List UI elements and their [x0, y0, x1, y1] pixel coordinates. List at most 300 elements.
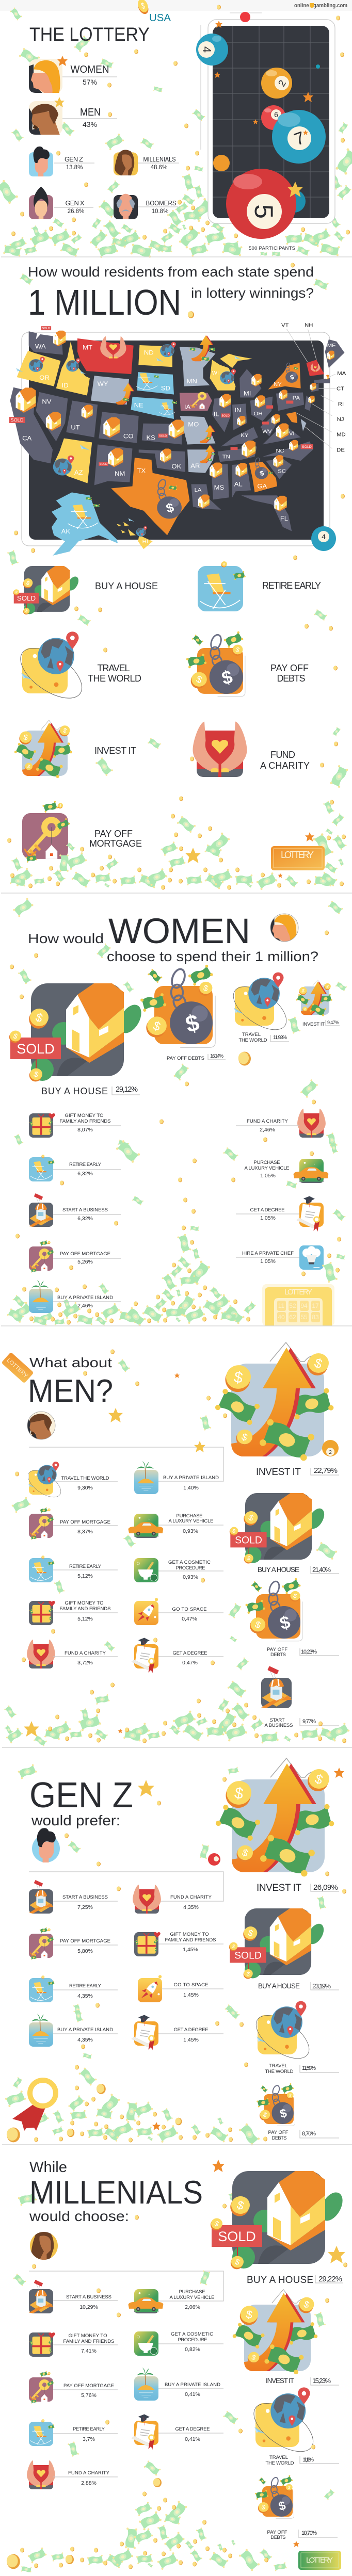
- list item: private island: 1,40%: [183, 1485, 199, 1491]
- state labels: KS: [146, 434, 155, 441]
- top choice: travel: TRAVEL: [242, 1032, 261, 1038]
- top choice: start a business: [261, 1666, 339, 1728]
- list item: luxury vehicle: A LUXURY VEHICLE: [245, 1165, 289, 1171]
- stat: women: WOMEN: [70, 64, 109, 75]
- stat: men: MEN: [80, 107, 101, 118]
- legend: pay off mortgage: MORTGAGE: [89, 838, 142, 849]
- list item: fund a charity: 2,88%: [81, 2480, 97, 2486]
- legend: pay off mortgage: [22, 801, 142, 863]
- list item: go to space: GO TO SPACE: [172, 1607, 206, 1612]
- list item: get a degree: GET A DEGREE: [173, 2027, 209, 2033]
- section: the lottery overview: [0, 0, 352, 258]
- list item: retire early: 6,32%: [77, 1171, 93, 1177]
- list item: get a degree: 0,47%: [182, 1660, 198, 1666]
- list item: start a business: 7,25%: [77, 1904, 93, 1910]
- state labels: CA: [22, 435, 32, 442]
- state labels: NE: [134, 402, 143, 409]
- ball 5 small: [208, 1853, 220, 1866]
- state labels: SD: [161, 385, 170, 392]
- top choice: travel the world: THE WORLD: [265, 2069, 294, 2075]
- top choice: invest it: INVEST IT: [256, 1467, 301, 1478]
- top choice: pay off debts: [255, 2475, 338, 2540]
- list item: go to space: 0,47%: [182, 1616, 197, 1622]
- list item: gift money: GIFT MONEY TO: [170, 1932, 209, 1937]
- list item: private island: BUY A PRIVATE ISLAND: [163, 1475, 219, 1481]
- top choice: start a business: A BUSINESS: [264, 1723, 293, 1728]
- list item: retire early: 5,12%: [77, 1573, 93, 1579]
- list item: retire early: RETIRE EARLY: [69, 1564, 102, 1569]
- falling money: men: [4, 1350, 350, 1746]
- list item: cosmetic procedure: 0,93%: [183, 1574, 198, 1580]
- top choice: buy a house: SOLD: [218, 2229, 256, 2244]
- legend: travel the world: TRAVEL: [97, 663, 130, 673]
- state labels: OR: [39, 375, 50, 381]
- top choice: invest it: [214, 1342, 339, 1478]
- lottery ticket orange: LOTTERY: [281, 850, 314, 860]
- external state labels: RI: [338, 401, 344, 407]
- top choice: pay off debts: PAY OFF: [268, 2130, 289, 2135]
- list item: gift money: GIFT MONEY TO: [65, 1113, 103, 1119]
- list item: private island: [134, 1461, 219, 1494]
- list item: start a business: [29, 2280, 118, 2313]
- state labels: FL: [280, 515, 288, 522]
- falling money: overview: [0, 0, 352, 258]
- list item: travel the world: TRAVEL THE WORLD: [61, 1476, 109, 1481]
- list item: start a business: START A BUSINESS: [62, 1894, 108, 1900]
- list item: retire early: [29, 1975, 118, 2002]
- top choice: invest: [296, 980, 340, 1027]
- legend: travel the world: [12, 631, 141, 708]
- map background: [29, 341, 324, 540]
- top choice: invest it: INVEST IT: [257, 1883, 301, 1893]
- stat: boomers: BOOMERS: [146, 199, 177, 207]
- stat: gen x: GEN X: [65, 199, 85, 207]
- lottery ticket green: LOTTERY: [306, 2556, 333, 2565]
- list item: get a degree: [132, 1638, 223, 1673]
- state labels: LA: [195, 488, 202, 493]
- state labels: OK: [171, 463, 182, 470]
- list item: retire early: 3,7%: [83, 2436, 95, 2442]
- list item: private island: 2,46%: [77, 1303, 93, 1309]
- list item: pay off mortgage: PAY OFF MORTGAGE: [60, 1938, 110, 1944]
- stars: [214, 21, 313, 197]
- list item: pay off mortgage: 5,76%: [81, 2392, 97, 2399]
- list item: retire early: RETIRE EARLY: [69, 1162, 102, 1168]
- map icon: mortgage key: [190, 393, 205, 409]
- top choice: buy a house: 29,12%: [116, 1086, 138, 1094]
- list item: cosmetic procedure: GET A COSMETIC: [168, 1560, 211, 1565]
- list item: start a business: 10,29%: [79, 2304, 98, 2310]
- legend: buy a house: [13, 566, 158, 614]
- list item: private island: 0,41%: [185, 2391, 200, 2397]
- falling money: gen z: [5, 1764, 346, 2146]
- list item: luxury vehicle: PURCHASE: [254, 1160, 280, 1165]
- list item: fund a charity: [27, 1640, 118, 1668]
- state labels: IA: [184, 404, 191, 411]
- heading: the lottery: THE LOTTERY: [29, 24, 150, 45]
- lottery ticket orange: [271, 846, 325, 870]
- list item: private island: [29, 2014, 118, 2047]
- ball 4: 4: [200, 46, 213, 53]
- list item: gift money: [29, 1600, 118, 1625]
- list item: fund a charity: [133, 1885, 212, 1914]
- top choice: travel the world: [249, 2001, 339, 2075]
- legend: pay off mortgage: PAY OFF: [94, 829, 133, 839]
- map icons: charity: [100, 336, 320, 371]
- heading: gen z: GEN Z: [29, 1775, 133, 1815]
- top choice: travel the world: TRAVEL: [269, 2063, 287, 2069]
- stat: boomers: [114, 194, 178, 219]
- list item: gift money: [29, 2332, 118, 2357]
- ball 4: [196, 34, 228, 66]
- logo shield icon: [310, 3, 314, 8]
- state labels: VI: [289, 431, 295, 437]
- legend: pay off debts: PAY OFF: [270, 663, 309, 673]
- stars: [138, 1768, 344, 1796]
- big medal: [12, 2078, 58, 2131]
- top choice: travel the world: 11,11%: [302, 2457, 314, 2463]
- lottery card: 55: [300, 1314, 308, 1321]
- state labels: CO: [123, 433, 134, 440]
- lottery card: 83: [312, 1314, 319, 1321]
- state labels: PA: [293, 395, 300, 401]
- external state labels: [281, 322, 346, 453]
- top choice: buy a house: 21,40%: [312, 1566, 331, 1574]
- list item: gift money: FAMILY AND FRIENDS: [165, 1937, 216, 1943]
- list item: pay off mortgage: [29, 2371, 118, 2404]
- heading: men: MEN?: [28, 1373, 113, 1409]
- ticket: lottery tilted: [1, 1352, 34, 1383]
- top choice: invest: INVEST IT: [302, 1022, 325, 1027]
- list item: private chef: 1,05%: [260, 1258, 276, 1265]
- section: spending legend: [7, 561, 348, 890]
- section: women: [7, 898, 347, 1326]
- list item: get a degree: GET A DEGREE: [250, 1207, 285, 1213]
- list item: get a degree: [132, 2414, 223, 2450]
- list item: get a degree: [132, 2015, 223, 2050]
- millenial portrait: [30, 2230, 58, 2260]
- participants label: 500 PARTICIPANTS: [249, 246, 295, 251]
- state labels: HI: [142, 539, 148, 545]
- stat: gen z: 13.8%: [66, 165, 83, 171]
- state labels: ID: [62, 382, 69, 389]
- top choice: buy a house: SOLD: [17, 1041, 55, 1057]
- list item: luxury vehicle: [129, 2289, 215, 2313]
- top choice: buy a house: [211, 2171, 347, 2286]
- stars: [212, 2160, 345, 2547]
- ball 5: 5: [249, 204, 278, 219]
- legend: fund a charity: A CHARITY: [260, 760, 310, 771]
- map panel: [22, 332, 330, 546]
- list item: start a business: [29, 1193, 121, 1227]
- state labels: [22, 343, 336, 545]
- top choice: pay off debts: DEBTS: [270, 1652, 286, 1658]
- sold signs: SOLD: [159, 435, 167, 438]
- list item: start a business: 6,32%: [77, 1216, 93, 1222]
- list item: cosmetic procedure: PROCEDURE: [178, 2337, 207, 2343]
- list item: start a business: [29, 1880, 118, 1914]
- sold signs: SOLD: [100, 463, 107, 466]
- top choice: buy a house: 23,19%: [312, 1982, 331, 1990]
- top choice: buy a house: BUY A HOUSE: [247, 2275, 313, 2286]
- list item: private chef: [236, 1245, 324, 1270]
- woman portrait: [270, 914, 298, 942]
- list item: fund a charity: 3,72%: [77, 1660, 93, 1666]
- top choice: start a business: START: [269, 1718, 285, 1723]
- list item: luxury vehicle: PURCHASE: [177, 1513, 202, 1519]
- legend: pay off debts: [186, 631, 309, 696]
- state labels: IN: [234, 407, 241, 414]
- top choice: buy a house: SOLD: [234, 1950, 262, 1962]
- list item: private chef: HIRE A PRIVATE CHEF: [242, 1251, 294, 1256]
- state labels: MN: [187, 378, 197, 385]
- list item: get a degree: GET A DEGREE: [172, 1650, 207, 1656]
- list item: gift money: FAMILY AND FRIENDS: [60, 1119, 110, 1124]
- top choice: travel the world: THE WORLD: [265, 2460, 294, 2466]
- state labels: NC: [276, 448, 284, 454]
- list item: pay off mortgage: PAY OFF MORTGAGE: [60, 1251, 110, 1257]
- top choice: travel the world: TRAVEL: [269, 2455, 288, 2460]
- state labels: ME: [327, 343, 336, 349]
- list item: cosmetic procedure: [134, 2331, 223, 2356]
- top choice: travel: 11,93%: [273, 1035, 287, 1041]
- top choice: travel: [226, 973, 294, 1043]
- list item: fund a charity: FUND A CHARITY: [170, 1894, 212, 1900]
- top choice: invest it: 2: [329, 1450, 332, 1455]
- falling money: map: [7, 263, 345, 565]
- man portrait: [27, 1412, 55, 1439]
- list item: get a degree: 1,05%: [260, 1215, 276, 1221]
- state labels: WA: [35, 343, 46, 350]
- legend: fund a charity: [193, 721, 310, 777]
- state labels: OH: [254, 411, 262, 417]
- stat: gen x: [29, 187, 93, 219]
- list item: luxury vehicle: A LUXURY VEHICLE: [168, 1518, 214, 1524]
- list item: private island: [29, 1280, 121, 1313]
- list item: pay off mortgage: 8,37%: [77, 1529, 93, 1535]
- state labels: AZ: [74, 469, 83, 476]
- list item: pay off mortgage: [29, 1507, 118, 1540]
- ticket: lottery tilted: LOTTERY: [6, 1357, 29, 1380]
- lottery card: LOTTERY: [284, 1288, 312, 1297]
- state labels: KY: [241, 432, 248, 439]
- list item: private island: BUY A PRIVATE ISLAND: [165, 2382, 220, 2388]
- stat: boomers: 10.8%: [152, 208, 168, 215]
- falling money: heading: [18, 2192, 347, 2269]
- top choice: buy a house: BUY A HOUSE: [258, 1982, 300, 1990]
- top choice: buy a house: [230, 1493, 339, 1574]
- top choice: buy a house: SOLD: [235, 1534, 262, 1546]
- lottery card: 17: [312, 1302, 319, 1309]
- heading: would prefer: would prefer:: [31, 1812, 120, 1828]
- section: state map: [7, 263, 346, 565]
- list item: retire early: [29, 2419, 118, 2446]
- list item: retire early: 4,35%: [77, 1993, 93, 1999]
- top choice: invest it: [215, 1758, 339, 1893]
- list item: pay off mortgage: PAY OFF MORTGAGE: [63, 2383, 114, 2389]
- falling money: legend: [7, 607, 348, 890]
- list item: get a degree: 0,41%: [185, 2436, 200, 2442]
- top choice: pay off debts: PAY OFF: [267, 2530, 287, 2535]
- map icons: debts: [157, 363, 298, 519]
- sold signs: SOLD: [221, 415, 230, 417]
- state labels: UT: [71, 424, 80, 431]
- top choice: invest: 9,47%: [327, 1020, 339, 1025]
- state labels: MI: [244, 390, 251, 397]
- top choice: invest it: [232, 2290, 339, 2385]
- list item: retire early: [29, 1155, 121, 1181]
- external state labels: DE: [337, 447, 345, 453]
- ball 6: 6: [274, 110, 278, 119]
- list item: start a business: START A BUSINESS: [62, 1207, 108, 1213]
- top choice: start a business: 9,77%: [302, 1719, 316, 1725]
- lottery card: 40: [278, 1314, 285, 1321]
- lottery card: 62: [289, 1314, 296, 1321]
- top choice: buy a house: BUY A HOUSE: [41, 1086, 108, 1096]
- state labels: ND: [144, 349, 154, 356]
- list item: cosmetic procedure: GET A COSMETIC: [171, 2331, 213, 2337]
- sold signs: SOLD: [302, 445, 312, 449]
- list item: gift money: 7,41%: [81, 2348, 97, 2354]
- top choice: pay off debts: PAY OFF DEBTS: [167, 1056, 204, 1061]
- list item: gift money: [134, 1932, 223, 1956]
- falling money: women top: [10, 898, 347, 1148]
- list item: private island: [134, 2368, 223, 2401]
- bracket line: [29, 1447, 223, 1481]
- ball 7: [272, 110, 326, 164]
- list item: go to space: [138, 1975, 223, 2002]
- heading: women: WOMEN: [108, 911, 250, 951]
- heading: how would residents: How would residents from each state spend: [28, 264, 314, 280]
- list item: fund a charity: [236, 1109, 326, 1138]
- state labels: TN: [222, 454, 230, 460]
- state labels: NY: [274, 381, 282, 387]
- stat: women: 57%: [83, 78, 97, 86]
- legend: retire early: RETIRE EARLY: [262, 580, 321, 591]
- state labels: GA: [257, 483, 267, 490]
- heading: in lottery winnings: in lottery winnings?: [191, 285, 314, 301]
- state labels: SC: [278, 468, 286, 474]
- list item: gift money: FAMILY AND FRIENDS: [60, 1606, 110, 1612]
- ball 4 on map: 4: [322, 532, 326, 541]
- legend: invest it: INVEST IT: [94, 746, 136, 756]
- list item: fund a charity: 4,35%: [183, 1904, 199, 1910]
- list item: gift money: 8,07%: [77, 1127, 93, 1133]
- list item: pay off mortgage: 5,26%: [77, 1259, 93, 1265]
- top choice: invest it: 26,09%: [313, 1883, 338, 1892]
- heading: would choose: would choose:: [29, 2208, 129, 2224]
- top choice: buy a house: [9, 983, 146, 1096]
- map icons: houses: [16, 331, 334, 511]
- list item: go to space: [134, 1598, 223, 1625]
- list item: luxury vehicle: [245, 1159, 328, 1183]
- external state labels: NH: [305, 322, 313, 328]
- list item: gift money: [29, 1113, 121, 1138]
- gen z portrait: [32, 1828, 60, 1862]
- state labels: TX: [137, 467, 146, 474]
- external state labels: NJ: [337, 416, 344, 423]
- list item: pay off mortgage: 5,80%: [77, 1948, 93, 1954]
- list item: luxury vehicle: 1,05%: [260, 1173, 276, 1179]
- stars: [108, 1373, 205, 1452]
- red dot: [240, 12, 250, 22]
- list item: fund a charity: 2,46%: [260, 1127, 275, 1133]
- ball 2: [261, 68, 292, 99]
- list item: start a business: START A BUSINESS: [66, 2294, 111, 2300]
- list item: private island: 4,35%: [77, 2037, 93, 2043]
- heading: 1 million: 1 MILLION: [28, 282, 181, 322]
- stat: millenials: MILLENIALS: [143, 155, 176, 163]
- stat: millenials: 48.6%: [151, 165, 167, 171]
- stat: gen z: GEN Z: [65, 155, 83, 163]
- list item: pay off mortgage: PAY OFF MORTGAGE: [60, 1519, 110, 1525]
- bracket line: [29, 1872, 223, 1901]
- external state labels: MA: [337, 371, 346, 377]
- top choice: pay off debts: 10,70%: [301, 2530, 317, 2536]
- state labels: NV: [42, 398, 52, 405]
- sold signs: SOLD: [11, 418, 23, 423]
- top choice: invest it: INVEST IT: [266, 2377, 294, 2385]
- stat: gen z: [29, 147, 94, 176]
- ball 5: [226, 169, 296, 239]
- top choice: pay off debts: 10,23%: [301, 1649, 317, 1655]
- stat: millenials: [114, 150, 179, 175]
- list item: luxury vehicle: PURCHASE: [179, 2289, 205, 2295]
- list item: cosmetic procedure: [134, 1558, 223, 1582]
- list item: luxury vehicle: 2,06%: [185, 2304, 200, 2310]
- state labels: AL: [234, 481, 243, 488]
- top header band: [0, 0, 352, 11]
- legend: buy a house: SOLD: [17, 594, 36, 602]
- map icons: retire: [68, 373, 177, 529]
- top choice: pay off debts: [140, 964, 226, 1061]
- state labels: MS: [214, 484, 224, 491]
- heading: how would: How would: [28, 931, 104, 946]
- state labels: MO: [188, 421, 199, 428]
- list item: go to space: 1,45%: [183, 1992, 199, 1998]
- top choice: pay off debts: 16,14%: [210, 1054, 223, 1059]
- top choice: pay off debts: DEBTS: [271, 2135, 287, 2141]
- list item: get a degree: 1,45%: [183, 2037, 199, 2043]
- list item: go to space: GO TO SPACE: [173, 1982, 209, 1988]
- list item: pay off mortgage: [29, 1927, 118, 1960]
- stat: men: 43%: [83, 120, 97, 128]
- list item: gift money: 1,45%: [183, 1947, 198, 1953]
- heading: what about: What about: [29, 1355, 113, 1370]
- map icons: invest arrows: [116, 335, 215, 463]
- list item: gift money: GIFT MONEY TO: [68, 2333, 107, 2339]
- list item: gift money: FAMILY AND FRIENDS: [63, 2339, 115, 2344]
- legend: retire early: [198, 561, 321, 611]
- panel: lottery balls: [196, 12, 335, 239]
- flat orange disc: [213, 155, 230, 171]
- top choice: travel: THE WORLD: [238, 1038, 267, 1043]
- list item: retire early: PETIRE EARLY: [73, 2426, 105, 2432]
- legend: travel the world: THE WORLD: [88, 673, 141, 684]
- bracket line: [29, 2271, 223, 2301]
- top choice: buy a house: [229, 1908, 339, 1990]
- list item: cosmetic procedure: 0,82%: [185, 2346, 200, 2353]
- list item: fund a charity: FUND A CHARITY: [68, 2470, 110, 2476]
- lottery card: 11: [278, 1302, 285, 1309]
- list item: get a degree: GET A DEGREE: [175, 2426, 210, 2432]
- state labels: IL: [214, 411, 219, 417]
- list item: travel the world: 9,30%: [77, 1485, 93, 1491]
- state labels: AK: [61, 528, 71, 535]
- top choice: buy a house: 29,22%: [318, 2275, 342, 2283]
- stat: women: [29, 56, 117, 93]
- section: millenials: [7, 2159, 347, 2572]
